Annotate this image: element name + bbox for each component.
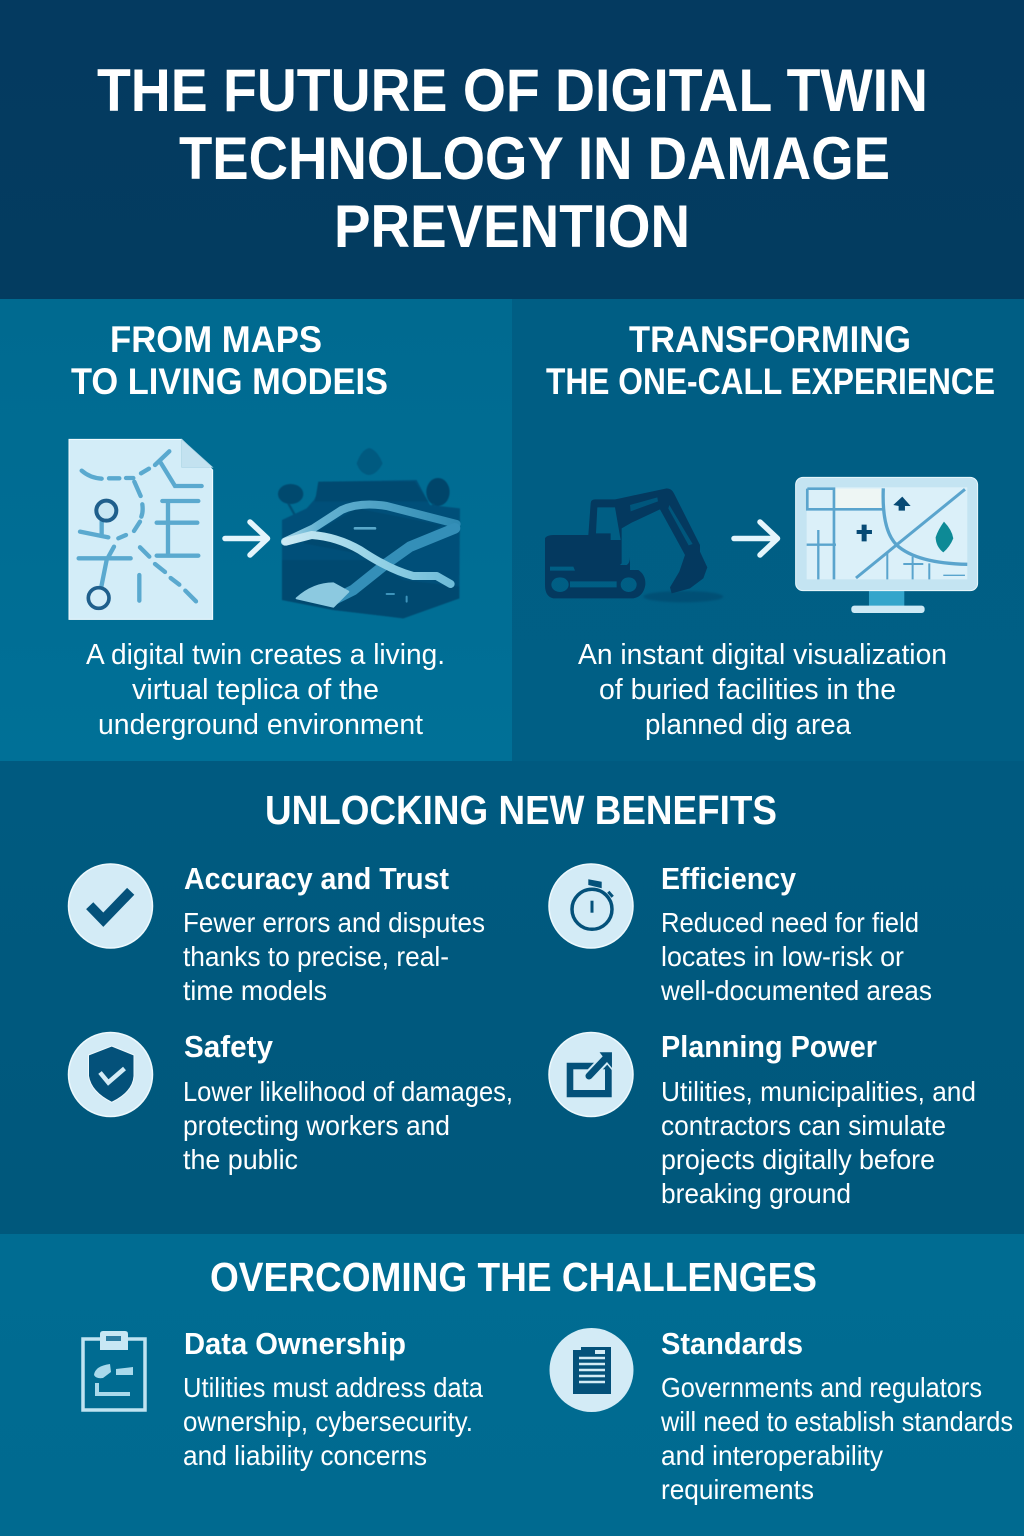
text: safety: Safety <box>184 1029 274 1064</box>
benefit: accuracy and trust <box>68 861 485 1006</box>
title <box>97 57 928 260</box>
text: data ownership: ownership, cybersecurity. <box>183 1406 473 1437</box>
text: efficiency <box>660 861 932 1006</box>
title: TECHNOLOGY IN DAMAGE <box>179 125 890 192</box>
text: planning power: breaking ground <box>661 1178 851 1209</box>
text: safety: the public <box>183 1144 298 1175</box>
text: one-call description <box>578 639 947 741</box>
benefit: efficiency <box>549 861 932 1006</box>
text: accuracy and trust: time models <box>183 975 327 1006</box>
text: accuracy and trust: Fewer errors and disputes <box>183 907 485 938</box>
text: efficiency: Efficiency <box>661 861 797 896</box>
text: safety <box>183 1029 513 1175</box>
heading: overcoming the challenges: OVERCOMING THE CHALLENGES <box>210 1254 817 1300</box>
text: planning power: contractors can simulate <box>661 1110 946 1141</box>
panel: header <box>0 0 1024 299</box>
text: planning power: Utilities, municipalities, and <box>661 1076 976 1107</box>
heading: transforming the one-call experience: TRANSFORMING <box>629 319 911 360</box>
text: planning power: Planning Power <box>661 1029 877 1064</box>
icon: excavator <box>545 488 723 602</box>
heading: transforming the one-call experience <box>546 319 995 402</box>
text: digital twin description: A digital twin creates a living. <box>86 639 445 671</box>
text: accuracy and trust: Accuracy and Trust <box>184 861 449 896</box>
text: planning power: projects digitally before <box>661 1144 935 1175</box>
text: digital twin description: virtual teplica of the <box>132 674 379 706</box>
icon: monitor with digital map <box>796 477 978 613</box>
heading: unlocking new benefits: UNLOCKING NEW BENEFITS <box>265 787 777 833</box>
heading: from maps to living models <box>71 319 388 402</box>
icon: 3D underground model <box>278 448 460 618</box>
panel: overcoming the challenges <box>0 1234 1024 1536</box>
text: data ownership: Utilities must address data <box>183 1372 483 1403</box>
title: THE FUTURE OF DIGITAL TWIN <box>97 57 928 124</box>
benefit: safety <box>68 1029 513 1175</box>
text: standards: requirements <box>661 1474 814 1505</box>
panel: transforming the one-call experience <box>512 299 1024 761</box>
text: standards: Governments and regulators <box>661 1372 982 1403</box>
text: standards: Standards <box>661 1326 803 1361</box>
heading: from maps to living models: TO LIVING MODEIS <box>71 361 388 402</box>
panel: from maps to living models <box>0 299 512 761</box>
icon: check mark <box>68 864 152 948</box>
arrow: map to model <box>225 522 268 555</box>
text: planning power <box>661 1029 976 1209</box>
text: standards <box>660 1326 1013 1505</box>
icon: document <box>550 1328 634 1412</box>
text: one-call description: planned dig area <box>645 709 852 741</box>
benefit: planning power <box>549 1029 976 1209</box>
text: data ownership: and liability concerns <box>183 1440 427 1471</box>
text: data ownership: Data Ownership <box>184 1326 406 1361</box>
title: PREVENTION <box>334 193 690 260</box>
text: accuracy and trust: thanks to precise, real- <box>183 941 449 972</box>
heading: from maps to living models: FROM MAPS <box>110 319 322 360</box>
icon: export arrow <box>549 1032 633 1116</box>
text: digital twin description: underground environment <box>98 709 423 741</box>
text: efficiency: well-documented areas <box>660 975 932 1006</box>
text: data ownership <box>183 1326 483 1471</box>
text: safety: protecting workers and <box>183 1110 450 1141</box>
text: efficiency: Reduced need for field <box>661 907 919 938</box>
challenge: standards <box>550 1326 1013 1505</box>
icon: clipboard <box>83 1331 145 1410</box>
icon: paper utility map <box>69 439 213 619</box>
panel: unlocking new benefits <box>0 761 1024 1234</box>
icon: shield <box>68 1032 152 1116</box>
text: accuracy and trust <box>183 861 485 1006</box>
challenge: data ownership <box>83 1326 483 1471</box>
arrow: excavator to screen <box>734 522 778 555</box>
text: digital twin description <box>86 639 445 741</box>
text: efficiency: locates in low-risk or <box>661 941 904 972</box>
text: standards: and interoperability <box>661 1440 883 1471</box>
text: safety: Lower likelihood of damages, <box>183 1076 513 1107</box>
text: one-call description: An instant digital visualization <box>578 639 947 671</box>
icon: stopwatch <box>549 864 633 948</box>
text: one-call description: of buried facilities in the <box>599 674 896 706</box>
